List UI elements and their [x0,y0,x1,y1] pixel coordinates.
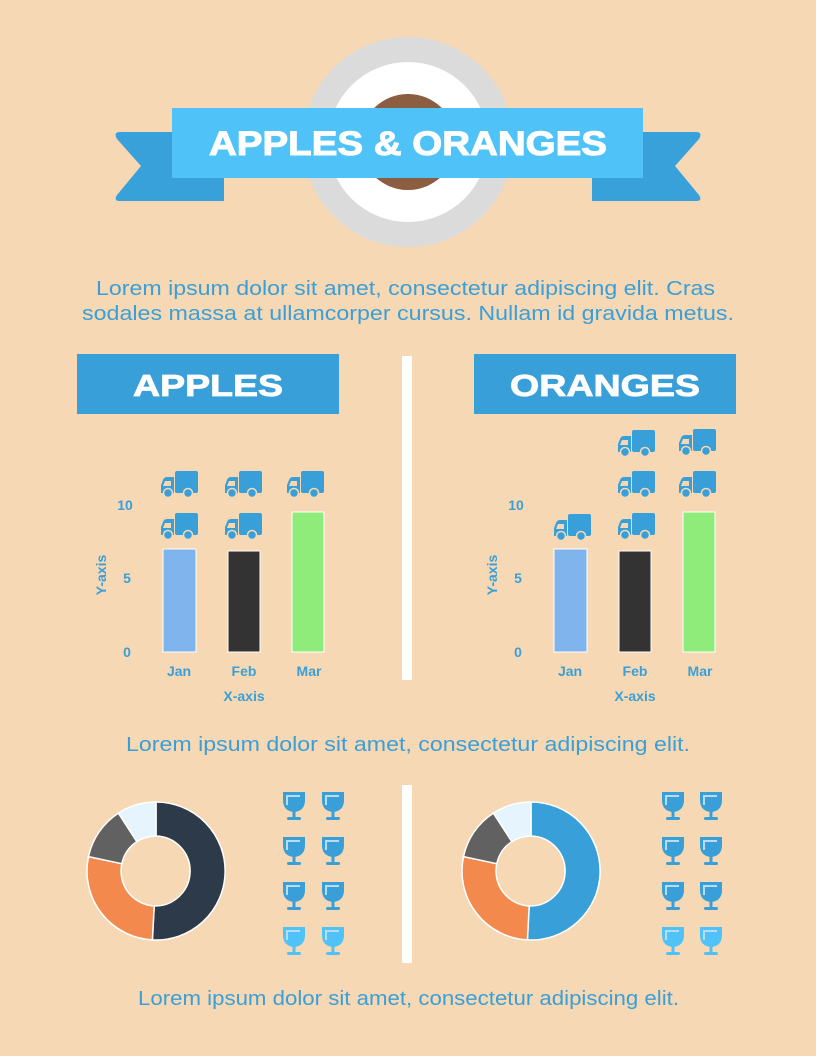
bar chart: apples: X-axis [223,688,265,704]
bar chart: apples: Mar [297,663,322,679]
intro text: sodales massa at ullamcorper cursus. Nullam id gravida metus. [82,303,734,325]
intro text [82,278,734,325]
bar chart: oranges [484,429,716,704]
bar chart: oranges: 10 [508,497,524,513]
bar chart: oranges: Jan [558,663,582,679]
glasses: apples [283,792,344,955]
footer text: Lorem ipsum dolor sit amet, consectetur adipiscing elit. [138,988,679,1010]
bar chart: oranges: Y-axis [484,555,500,595]
glasses: oranges [662,792,722,955]
heading: apples [77,354,339,414]
title: APPLES & ORANGES [209,125,607,163]
bar chart: oranges: Feb [623,663,647,679]
intro text: Lorem ipsum dolor sit amet, consectetur adipiscing elit. Cras [96,278,715,300]
heading: oranges [474,354,736,414]
middle text: Lorem ipsum dolor sit amet, consectetur adipiscing elit. [126,734,690,756]
bar chart: apples: 10 [117,497,133,513]
donut: oranges [462,802,600,940]
bar chart: apples [93,471,324,704]
heading: oranges: ORANGES [510,368,700,403]
donut: apples [87,802,225,940]
bar chart: oranges: Mar [688,663,713,679]
header badge [116,37,700,247]
bar chart: oranges: 5 [514,570,522,586]
bar chart: apples: 0 [123,644,131,660]
bar chart: oranges: X-axis [614,688,656,704]
bar chart: apples: 5 [123,570,131,586]
bar chart: apples: Feb [232,663,256,679]
bar chart: apples: Jan [167,663,191,679]
bar chart: apples: Y-axis [93,555,109,595]
bar chart: oranges: 0 [514,644,522,660]
heading: apples: APPLES [133,368,283,403]
